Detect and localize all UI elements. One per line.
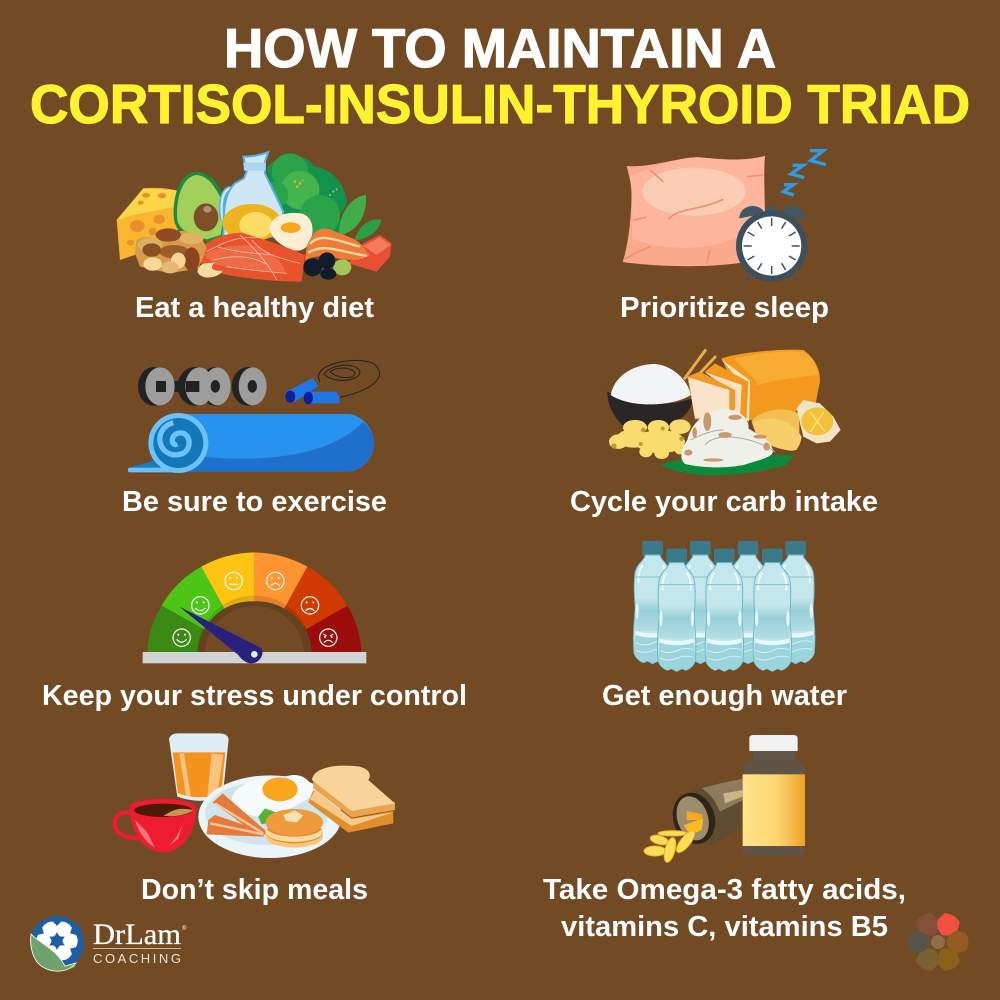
label: don't skip meals: Don’t skip meals bbox=[141, 874, 368, 906]
label: keep stress under control: Keep your stress under control bbox=[42, 680, 467, 712]
label: cycle your carb intake: Cycle your carb intake bbox=[570, 486, 878, 518]
label: get enough water: Get enough water bbox=[602, 680, 847, 712]
label: omega-3 and vitamins: vitamins C, vitamins B5 bbox=[561, 911, 888, 943]
icon: pillow and alarm clock bbox=[623, 151, 826, 282]
icon: healthy food bbox=[117, 152, 392, 282]
icon: supplement bottles bbox=[644, 735, 805, 864]
logo: DrLam Coaching: DrLam bbox=[93, 918, 181, 951]
watermark: flower bbox=[908, 910, 968, 974]
icon: carbohydrate foods bbox=[607, 349, 841, 475]
logo: DrLam Coaching: COACHING bbox=[93, 951, 181, 966]
icon: breakfast bbox=[115, 733, 395, 858]
icon: stress gauge bbox=[143, 552, 366, 663]
icon: water bottles bbox=[633, 541, 815, 671]
icon: exercise equipment bbox=[128, 360, 380, 473]
logo: DrLam Coaching: ® bbox=[182, 925, 187, 932]
title: HOW TO MAINTAIN A bbox=[224, 17, 776, 79]
label: be sure to exercise: Be sure to exercise bbox=[122, 486, 387, 518]
title bbox=[30, 17, 970, 135]
label: omega-3 and vitamins: Take Omega-3 fatty acids, bbox=[543, 874, 906, 906]
logo: DrLam Coaching bbox=[30, 916, 187, 971]
label: eat a healthy diet: Eat a healthy diet bbox=[135, 292, 374, 324]
title: CORTISOL-INSULIN-THYROID TRIAD bbox=[30, 73, 970, 135]
label: prioritize sleep: Prioritize sleep bbox=[620, 292, 829, 324]
